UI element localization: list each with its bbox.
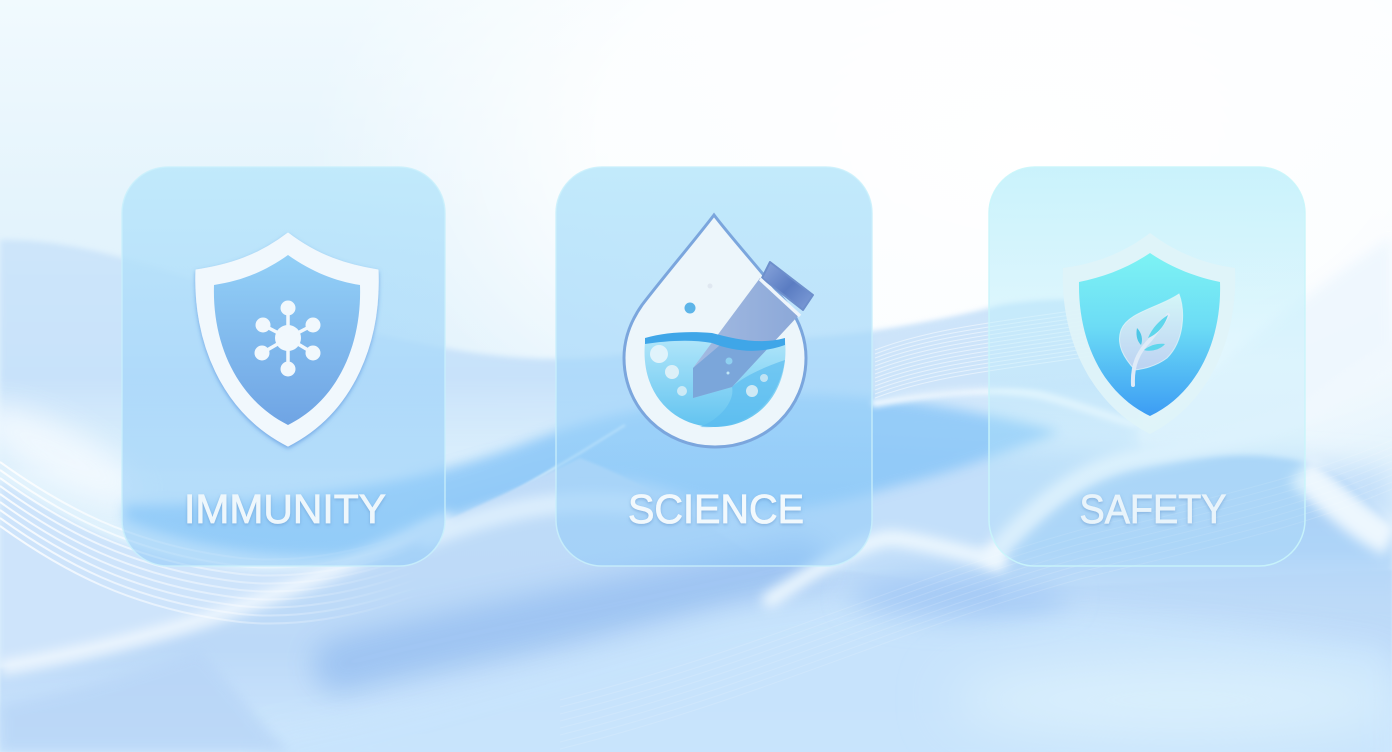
card background [122,167,445,566]
card background [556,167,872,566]
label: science: SCIENCE [628,486,804,532]
fine line texture: left ribbon [0,462,420,624]
panel: safety [989,167,1305,566]
icon: water drop with test tube [624,215,813,447]
card background [989,167,1305,566]
icon: shield with leaf [1063,233,1235,434]
fine line texture: lower ribbon [560,440,1392,749]
label: immunity: IMMUNITY [184,486,386,532]
label: safety: SAFETY [1080,486,1226,532]
panel: immunity [122,167,445,566]
panel: science [556,167,872,566]
icon: shield with immune cell [196,233,378,446]
fine line texture: right ribbon [875,305,1110,398]
